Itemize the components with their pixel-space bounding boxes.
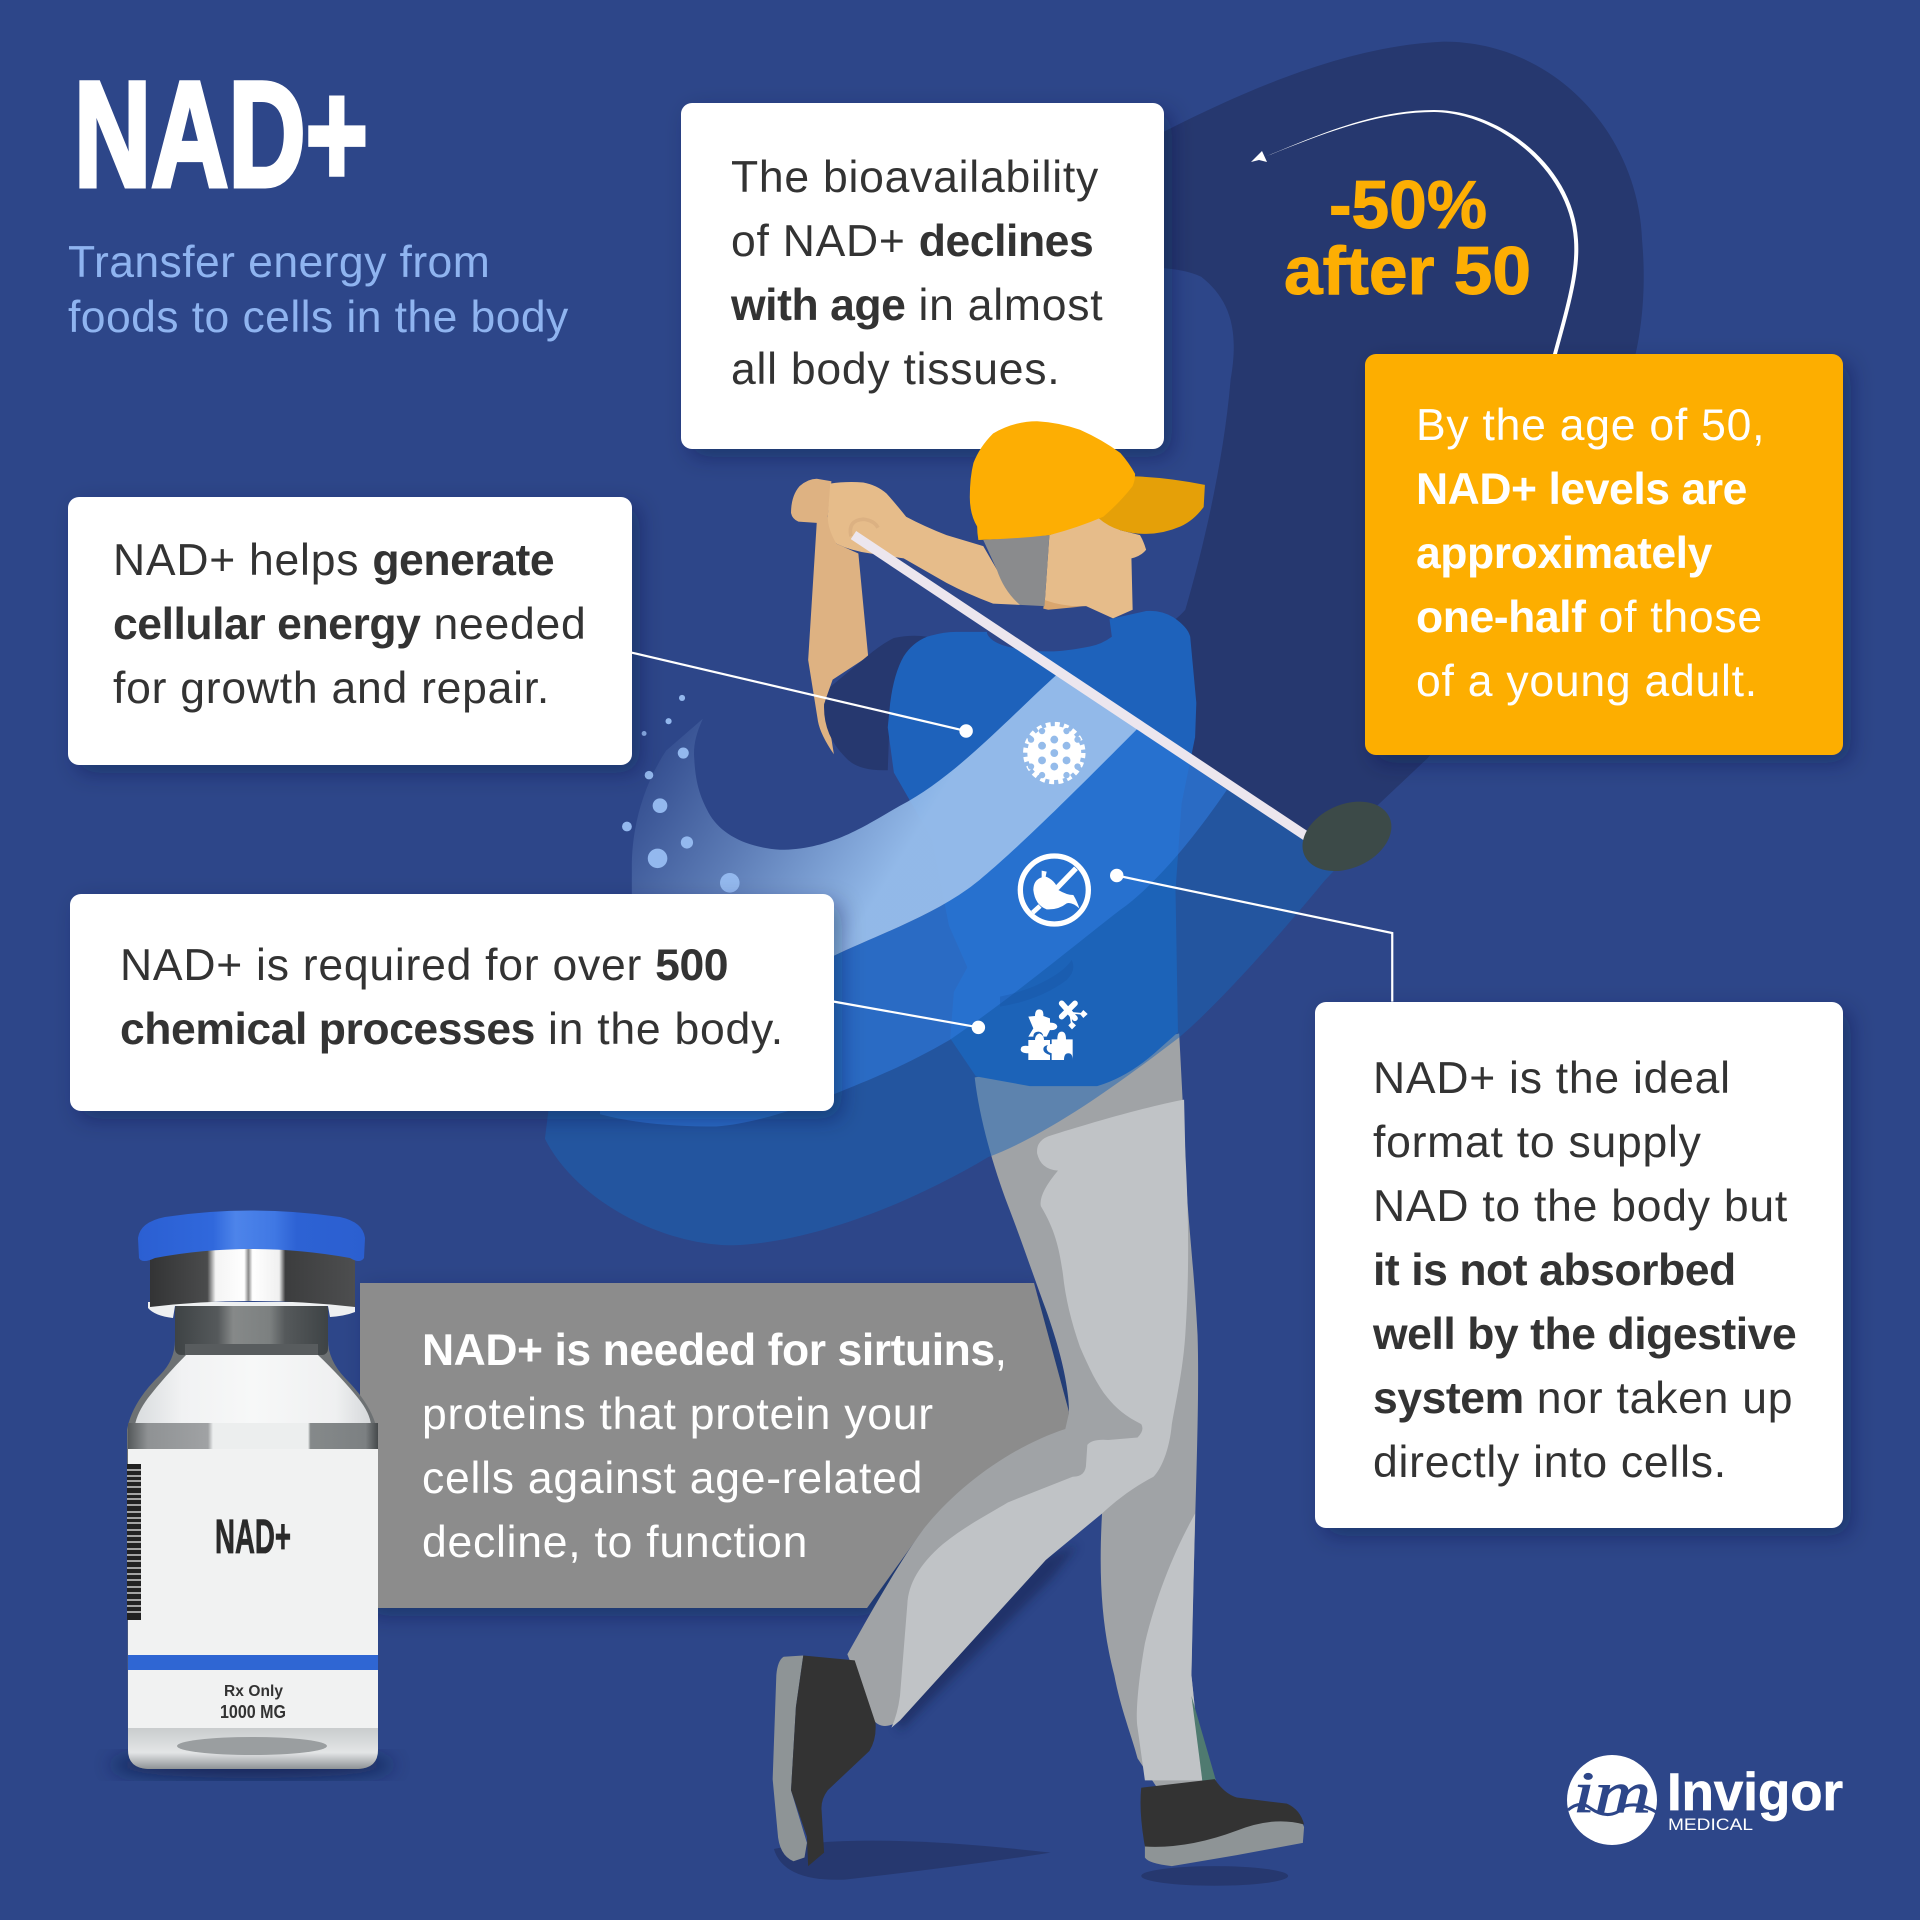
panel: ideal format: NAD to the body but xyxy=(1373,1182,1788,1231)
panel: age 50 (orange): By the age of 50, xyxy=(1416,401,1765,450)
front arm and hand xyxy=(828,482,1020,605)
panel: age 50 (orange): NAD+ levels are xyxy=(1416,465,1747,514)
vial dose: 1000 MG xyxy=(220,1702,286,1722)
panel: cellular energy: NAD+ helps generate xyxy=(113,536,554,585)
golf club xyxy=(853,535,1402,884)
glass interior xyxy=(135,1354,371,1425)
statistic: -50% after 50 xyxy=(1284,167,1531,309)
title: NAD+ xyxy=(74,50,368,218)
panel: sirtuins (grey): decline, to function xyxy=(422,1518,808,1567)
logo: Invigor Medical: im xyxy=(1573,1760,1651,1825)
panel: bioavailability: with age in almost xyxy=(730,281,1103,330)
thumb crease xyxy=(850,519,878,536)
torso fold xyxy=(1000,960,1073,1007)
left shoe xyxy=(773,1656,876,1866)
panel: bioavailability: of NAD+ declines xyxy=(731,217,1093,266)
label stripe xyxy=(128,1655,378,1670)
panel: age 50 (orange): approximately xyxy=(1416,529,1713,578)
collar xyxy=(987,604,1112,651)
hair xyxy=(983,535,1049,606)
metal ring xyxy=(150,1247,355,1307)
icon: cell xyxy=(1026,724,1083,782)
panel: bioavailability: all body tissues. xyxy=(731,345,1060,394)
panel: sirtuins (grey): NAD+ is needed for sirtuins, xyxy=(422,1326,1008,1375)
cap brim xyxy=(1098,476,1205,534)
vial rx: Rx Only xyxy=(224,1683,283,1700)
shin shadow xyxy=(894,1545,1078,1731)
panel: bioavailability: The bioavailability xyxy=(731,153,1099,202)
cap crown xyxy=(970,421,1135,540)
torso xyxy=(888,611,1196,1086)
vial xyxy=(127,1210,378,1769)
background swirl: dark crescent xyxy=(1057,42,1644,836)
panel: age 50 (orange): of a young adult. xyxy=(1416,657,1758,706)
ribbon bands over the figure xyxy=(545,675,1347,1245)
back arm and hand xyxy=(791,479,868,754)
neck shade xyxy=(1043,600,1086,610)
subtitle xyxy=(68,238,569,342)
statistic: -50% after 50: -50% xyxy=(1329,167,1487,243)
glass outer edge xyxy=(127,1340,378,1769)
liquid level xyxy=(128,1423,378,1449)
glass base xyxy=(128,1728,378,1769)
panel: sirtuins (grey): proteins that protein your xyxy=(422,1390,934,1439)
panel: ideal format: well by the digestive xyxy=(1372,1310,1796,1359)
logo: Invigor Medical: MEDICAL xyxy=(1668,1815,1753,1834)
trousers xyxy=(847,1033,1216,1788)
leader line: cellular energy xyxy=(632,653,973,738)
neck xyxy=(175,1303,328,1355)
panel: chemical processes xyxy=(70,894,834,1111)
panel: sirtuins (grey) xyxy=(360,1283,1069,1608)
statistic: -50% after 50: after 50 xyxy=(1284,233,1531,309)
logo: Invigor Medical xyxy=(1567,1755,1843,1845)
icon: puzzle xyxy=(1021,1003,1088,1060)
panel: cellular energy: cellular energy needed xyxy=(113,600,586,649)
right shoe xyxy=(1141,1779,1304,1866)
panel: bioavailability xyxy=(681,103,1164,449)
icon: no stomach xyxy=(1020,856,1088,924)
barcode xyxy=(127,1464,141,1620)
band: lighter blue xyxy=(600,729,1227,1127)
band: mid blue xyxy=(545,729,1347,1245)
panel: age 50 (orange) xyxy=(1365,354,1843,755)
leader line: ideal format xyxy=(1110,869,1392,1002)
panel: chemical processes: chemical processes in the body. xyxy=(120,1005,784,1054)
panel: age 50 (orange): one-half of those xyxy=(1416,593,1763,642)
vial shadow xyxy=(110,1752,394,1778)
panel: chemical processes: NAD+ is required for over 500 xyxy=(120,941,728,990)
panel: cellular energy xyxy=(68,497,632,765)
subtitle: Transfer energy from xyxy=(68,238,490,287)
panel: ideal format: NAD+ is the ideal xyxy=(1373,1054,1731,1103)
subtitle: foods to cells in the body xyxy=(68,293,569,342)
flange xyxy=(148,1302,355,1318)
blue cap xyxy=(138,1210,365,1261)
bubbles xyxy=(622,695,740,893)
sleeve xyxy=(824,636,927,770)
ground shadows xyxy=(774,1841,1288,1886)
panel: cellular energy: for growth and repair. xyxy=(113,664,550,713)
leader line: chemical processes xyxy=(834,1002,985,1034)
panel: ideal format: system nor taken up xyxy=(1373,1374,1793,1423)
neck lower band xyxy=(185,1344,318,1355)
panel: ideal format: it is not absorbed xyxy=(1373,1246,1736,1295)
band: pale ribbon with tail xyxy=(632,675,1138,998)
neck and face xyxy=(1044,518,1146,618)
logo: Invigor Medical: Invigor xyxy=(1667,1763,1843,1822)
label xyxy=(128,1449,378,1728)
panel: ideal format: directly into cells. xyxy=(1373,1438,1727,1487)
vial name: NAD+ xyxy=(215,1511,291,1564)
panel: ideal format: format to supply xyxy=(1373,1118,1702,1167)
panel: sirtuins (grey): cells against age-related xyxy=(422,1454,923,1503)
base shade xyxy=(177,1737,327,1755)
panel: ideal format xyxy=(1315,1002,1843,1528)
barcode gaps xyxy=(127,1470,141,1612)
arrow: curved xyxy=(1251,110,1578,354)
golfer figure xyxy=(773,421,1304,1886)
